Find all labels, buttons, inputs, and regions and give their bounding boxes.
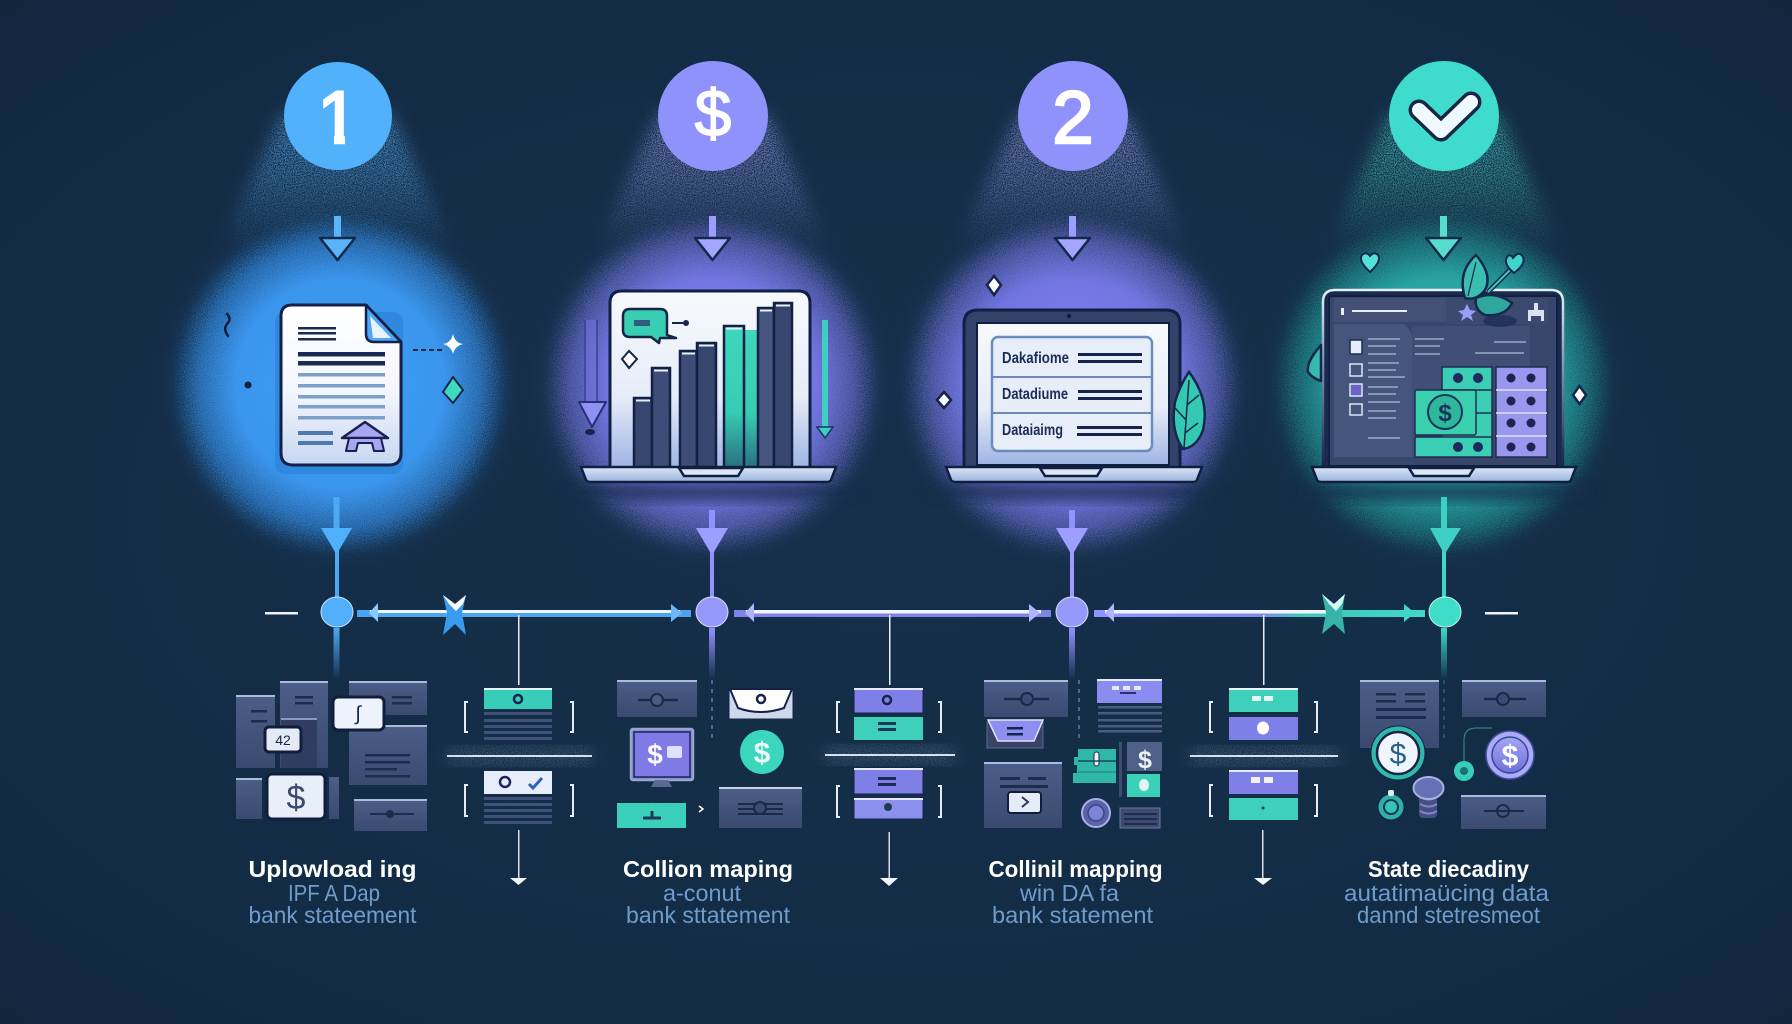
- caption: step 1: bank stateement: [248, 902, 417, 928]
- money card: $: [1438, 400, 1452, 427]
- icon: bank statement document: [275, 305, 403, 474]
- diamonds around laptop: [937, 276, 1001, 408]
- white card: small: 42: [275, 732, 291, 748]
- white card: small: [265, 727, 301, 752]
- icon: laptop with dashboard: [1308, 254, 1576, 482]
- caption: step 3: [988, 856, 1162, 928]
- coin: small teal on wire: [1454, 728, 1492, 781]
- white video card: [1008, 792, 1041, 813]
- caption: step 4: dannd stetresmeot: [1357, 902, 1541, 928]
- timeline: horizontal connectors: [265, 594, 1518, 635]
- caption: step 2: a-conut: [663, 880, 742, 906]
- white card: glyph: ∫: [354, 703, 362, 725]
- glow: step 4: [1267, 206, 1619, 562]
- caption: step 2: Collion maping: [623, 856, 793, 882]
- panel: step 1 upload icons: [236, 681, 427, 831]
- step 2 header: dollar badge with spotlight: $: [695, 76, 731, 150]
- coin: large teal ring: $: [1390, 738, 1407, 771]
- glow: step 2: [536, 206, 888, 562]
- dashboard header: [1334, 298, 1548, 324]
- coin: purple dollar: $: [1502, 740, 1519, 773]
- dollar card: [1127, 742, 1162, 774]
- step 3 header: numbered badge with spotlight: 2: [1052, 76, 1094, 159]
- laptop base: [581, 467, 836, 482]
- arrow: badge 1 to document: [320, 216, 355, 260]
- caption: step 2: [623, 856, 793, 928]
- data table rows: Dataiaimg: [1002, 422, 1063, 439]
- white card: dollar: [267, 774, 325, 819]
- end dashes: [265, 612, 1518, 614]
- arrow: badge 3 to laptop: [1055, 216, 1090, 260]
- caption: step 4: [1344, 856, 1549, 928]
- step 4 header: check badge with spotlight: [1325, 61, 1563, 250]
- icon: purple envelope: [987, 720, 1043, 748]
- caption: step 3: win DA fa: [1019, 880, 1119, 906]
- data table rows: Dakafiome: [1002, 350, 1069, 367]
- coin: small teal lock: [1378, 790, 1404, 820]
- icon: envelope: [729, 689, 793, 719]
- caption: step 4: autatimaücing data: [1344, 880, 1549, 906]
- heart and diamond marks near dashboard: [1361, 253, 1586, 404]
- dollar card: $: [1138, 746, 1152, 774]
- laptop base: [946, 467, 1202, 482]
- connector block group: between step 1 and 2: [447, 615, 592, 885]
- side arrow: purple: [579, 320, 606, 435]
- icon: monitor with dollar: $: [647, 739, 663, 770]
- purple badge: [1082, 799, 1110, 827]
- icon: leaves on top of laptop: [1308, 254, 1524, 381]
- connector block group: between step 3 and 4: [1190, 615, 1338, 885]
- icon: laptop with bar chart: [579, 291, 836, 482]
- connector block group: between step 2 and 3: [825, 615, 955, 886]
- icon: monitor with dollar: [631, 729, 693, 787]
- icon: laptop with data table: [946, 310, 1205, 482]
- teal grid: [1415, 367, 1492, 457]
- caption: step 1: [248, 856, 417, 928]
- glow: step 3: [897, 206, 1249, 562]
- coin stack: [1414, 777, 1444, 818]
- icon: bank building: [342, 422, 388, 451]
- timeline node 2 with incoming arrow: [696, 510, 728, 680]
- panel: step 3 icons: [984, 679, 1162, 828]
- white card: glyph: [333, 697, 384, 730]
- purple grid: [1496, 367, 1547, 457]
- panel: step 4 icons: [1360, 680, 1546, 829]
- money card: [1415, 390, 1476, 435]
- teal card: [1127, 774, 1160, 797]
- caption: step 3: Collinil mapping: [988, 856, 1162, 882]
- coin: large teal ring: [1371, 726, 1425, 780]
- timeline node 3 with incoming arrow: [1056, 510, 1088, 680]
- caption: step 3: bank statement: [992, 902, 1154, 928]
- arrow: badge 2 to chart: [695, 216, 730, 260]
- glow: step 1: [164, 206, 516, 562]
- teal slider card: [1073, 749, 1116, 783]
- coin: purple dollar: [1486, 731, 1534, 779]
- icon: teal dollar coin: [740, 730, 784, 774]
- connector: node 2 to node 3: [734, 603, 1051, 622]
- bar chart: [634, 303, 792, 468]
- panel: step 2 icons: [617, 680, 802, 828]
- data table rows: Datadiume: [1002, 386, 1068, 403]
- connector: node 3 to node 4: [1094, 594, 1425, 634]
- side arrow: teal: [817, 320, 833, 438]
- caption: step 2: bank sttatement: [626, 902, 791, 928]
- arrow: badge 4 to dashboard: [1426, 216, 1461, 260]
- caption: step 4: State diecadiny: [1368, 856, 1529, 882]
- caption: step 1: IPF A Dap: [288, 880, 380, 906]
- timeline node 1 with incoming arrow: [321, 497, 353, 680]
- caption: step 1: Uplowload ing: [248, 856, 416, 882]
- step 1 header: numbered badge with spotlight: [218, 62, 456, 250]
- connector: node 1 to node 2: [357, 595, 691, 635]
- speech bubble: [623, 309, 689, 343]
- data table rows: [992, 337, 1152, 451]
- white card: dollar: $: [287, 779, 306, 817]
- icon: leaf: [1174, 372, 1205, 449]
- icon: teal dollar coin: $: [754, 737, 771, 770]
- laptop base: [1312, 467, 1576, 482]
- decorative marks around document: [225, 314, 463, 403]
- step 1 header: numbered badge with spotlight: 1: [317, 76, 359, 159]
- timeline node 4 with incoming arrow: [1429, 497, 1461, 680]
- sidebar list: [1334, 324, 1530, 457]
- step 2 header: dollar badge with spotlight: [594, 61, 832, 250]
- step 3 header: numbered badge with spotlight: [954, 61, 1192, 250]
